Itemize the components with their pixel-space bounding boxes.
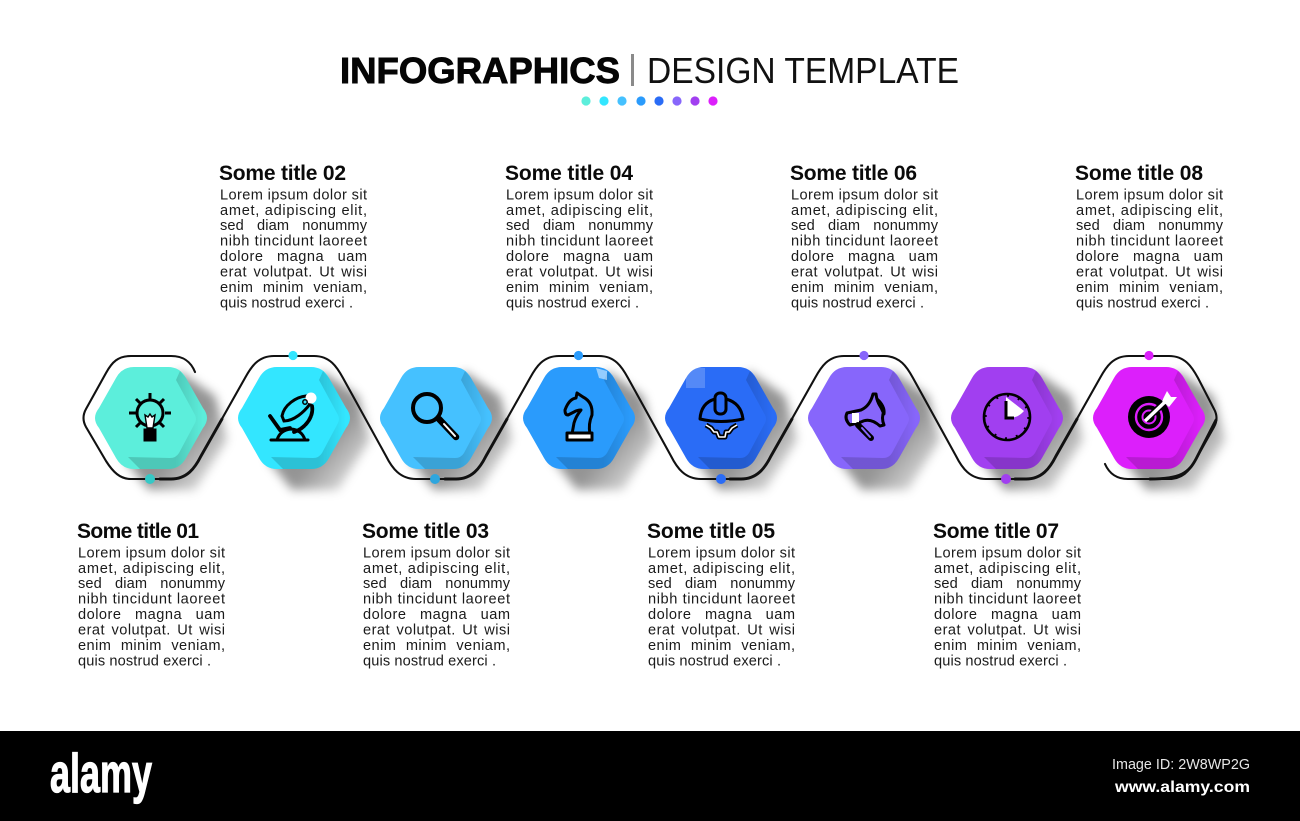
text block: Some title 05: amet, adipiscing elit, (648, 561, 795, 577)
text block: Some title 04: amet, adipiscing elit, (506, 203, 653, 219)
text block: Some title 05: dolore magna uam (648, 607, 795, 623)
text block: Some title 02: enim minim veniam, (220, 280, 367, 296)
text block: Some title 08: dolore magna uam (1076, 249, 1223, 265)
text block: Some title 03: Lorem ipsum dolor sit (363, 545, 510, 561)
text block: Some title 07: nibh tincidunt laoreet (934, 592, 1081, 608)
text block: Some title 02: amet, adipiscing elit, (220, 203, 367, 219)
text block: Some title 05: erat volutpat. Ut wisi (648, 622, 795, 638)
text block: Some title 04: sed diam nonummy (506, 218, 654, 234)
text block: Some title 06: nibh tincidunt laoreet (791, 234, 938, 250)
text block: Some title 02: sed diam nonummy (220, 218, 368, 234)
text block: Some title 05: Lorem ipsum dolor sit (648, 545, 795, 561)
text block: Some title 04: enim minim veniam, (506, 280, 653, 296)
text block: Some title 03: quis nostrud exerci . (363, 653, 496, 669)
text block: Some title 03: Some title 03 (362, 520, 489, 543)
text block: Some title 03: amet, adipiscing elit, (363, 561, 510, 577)
text block: Some title 05: enim minim veniam, (648, 638, 795, 654)
text block: Some title 08: nibh tincidunt laoreet (1076, 234, 1223, 250)
text block: Some title 01: amet, adipiscing elit, (78, 561, 225, 577)
hexagon shadows (125, 371, 1225, 490)
text block: Some title 01 (77, 520, 226, 669)
title colour dots (581, 96, 718, 106)
text block: Some title 02: Lorem ipsum dolor sit (220, 187, 367, 203)
site url: www.alamy.com (1114, 779, 1250, 796)
text block: Some title 06: Some title 06 (790, 162, 917, 185)
text block: Some title 08: Lorem ipsum dolor sit (1076, 187, 1223, 203)
text block: Some title 07 (933, 520, 1082, 669)
text block: Some title 04: erat volutpat. Ut wisi (506, 264, 653, 280)
text block: Some title 02: erat volutpat. Ut wisi (220, 264, 367, 280)
text block: Some title 01: sed diam nonummy (78, 576, 226, 592)
text block: Some title 02: dolore magna uam (220, 249, 367, 265)
hexagon 04: strategy (523, 367, 635, 469)
text block: Some title 07: erat volutpat. Ut wisi (934, 622, 1081, 638)
text block: Some title 06: sed diam nonummy (791, 218, 939, 234)
line marker dots (145, 351, 1154, 484)
text block: Some title 02: nibh tincidunt laoreet (220, 234, 367, 250)
hexagon 05: engineering (665, 367, 777, 469)
text block: Some title 08: enim minim veniam, (1076, 280, 1223, 296)
text block: Some title 08: erat volutpat. Ut wisi (1076, 264, 1223, 280)
text block: Some title 06: amet, adipiscing elit, (791, 203, 938, 219)
text block: Some title 08 (1075, 162, 1224, 311)
text block: Some title 08: Some title 08 (1075, 162, 1203, 185)
text block: Some title 08: quis nostrud exerci . (1076, 295, 1209, 311)
text block: Some title 01: nibh tincidunt laoreet (78, 592, 225, 608)
text block: Some title 03: dolore magna uam (363, 607, 510, 623)
hexagon 07: time (951, 367, 1063, 469)
text block: Some title 07: amet, adipiscing elit, (934, 561, 1081, 577)
icon: target with arrow (1128, 391, 1177, 438)
text block: Some title 07: enim minim veniam, (934, 638, 1081, 654)
text block: Some title 05 (647, 520, 796, 669)
hexagon 08: goal (1093, 367, 1205, 469)
text block: Some title 01: erat volutpat. Ut wisi (78, 622, 225, 638)
text block: Some title 06: erat volutpat. Ut wisi (791, 264, 938, 280)
watermark patch (596, 368, 607, 380)
text block: Some title 02: Some title 02 (219, 162, 346, 185)
title (340, 50, 959, 91)
text block: Some title 07: Lorem ipsum dolor sit (934, 545, 1081, 561)
footer bar (0, 731, 1300, 821)
text block: Some title 07: Some title 07 (933, 520, 1059, 543)
text block: Some title 08: amet, adipiscing elit, (1076, 203, 1223, 219)
image id: Image ID: 2W8WP2G (1112, 757, 1250, 773)
text block: Some title 06 (790, 162, 939, 311)
hexagon 06: marketing (808, 367, 920, 469)
text block: Some title 01: Lorem ipsum dolor sit (78, 545, 225, 561)
title: DESIGN TEMPLATE (647, 50, 959, 91)
logo text: alamy (50, 742, 152, 804)
text block: Some title 06: enim minim veniam, (791, 280, 938, 296)
text block: Some title 04: nibh tincidunt laoreet (506, 234, 653, 250)
text block: Some title 06: quis nostrud exerci . (791, 295, 924, 311)
text block: Some title 07: sed diam nonummy (934, 576, 1082, 592)
text block: Some title 04: dolore magna uam (506, 249, 653, 265)
connecting line (84, 356, 1216, 479)
text block: Some title 06: Lorem ipsum dolor sit (791, 187, 938, 203)
text block: Some title 05: sed diam nonummy (648, 576, 796, 592)
text block: Some title 02 (219, 162, 368, 311)
icon: megaphone (846, 394, 884, 438)
text block: Some title 03: nibh tincidunt laoreet (363, 592, 510, 608)
hexagon 02: research (238, 367, 350, 469)
text block: Some title 08: sed diam nonummy (1076, 218, 1224, 234)
text block: Some title 04: Lorem ipsum dolor sit (506, 187, 653, 203)
text block: Some title 04: Some title 04 (505, 162, 633, 185)
text block: Some title 05: quis nostrud exerci . (648, 653, 781, 669)
icon: magnifying glass (413, 394, 456, 437)
icon: chess knight (565, 393, 592, 440)
text block: Some title 04: quis nostrud exerci . (506, 295, 639, 311)
text block: Some title 01: dolore magna uam (78, 607, 225, 623)
hexagon 03: search (380, 367, 492, 469)
text block: Some title 01: enim minim veniam, (78, 638, 225, 654)
text block: Some title 07: dolore magna uam (934, 607, 1081, 623)
watermark patch (686, 368, 705, 388)
text block: Some title 02: quis nostrud exerci . (220, 295, 353, 311)
text block: Some title 03: sed diam nonummy (363, 576, 511, 592)
text block: Some title 01: Some title 01 (77, 520, 199, 543)
text block: Some title 01: quis nostrud exerci . (78, 653, 211, 669)
text block: Some title 03: erat volutpat. Ut wisi (363, 622, 510, 638)
hexagon 01: idea (95, 367, 207, 469)
text block: Some title 04 (505, 162, 654, 311)
icon: microscope (270, 392, 316, 440)
text block: Some title 05: nibh tincidunt laoreet (648, 592, 795, 608)
text block: Some title 07: quis nostrud exerci . (934, 653, 1067, 669)
icon: helmet and gear (700, 393, 743, 437)
icon: light bulb (129, 393, 171, 440)
text block: Some title 03: enim minim veniam, (363, 638, 510, 654)
icon: clock (984, 394, 1030, 440)
text block: Some title 03 (362, 520, 511, 669)
text block: Some title 06: dolore magna uam (791, 249, 938, 265)
text block: Some title 05: Some title 05 (647, 520, 775, 543)
title: INFOGRAPHICS (340, 50, 620, 91)
